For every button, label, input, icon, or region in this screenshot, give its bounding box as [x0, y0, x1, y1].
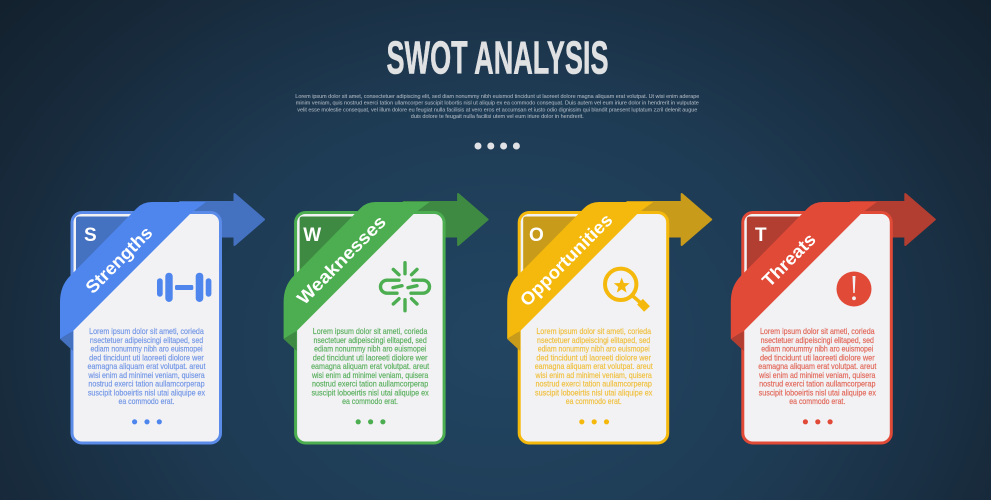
- arrow: [180, 194, 264, 245]
- body text: ediam nonummy nibh aro euismopei: [538, 345, 650, 354]
- letter tab: [300, 216, 374, 290]
- body text: nsectetuer adipeiscingi elitaped, sed: [313, 336, 427, 345]
- body text: Lorem ipsum dolor sit ameti, corieda: [760, 327, 875, 336]
- dots: [803, 419, 833, 424]
- body text: suscipit loboeirtis nisl utai aliquipe ex: [759, 388, 876, 397]
- arrow: [851, 194, 935, 245]
- body text: ea commodo erat.: [342, 397, 398, 406]
- panel: opportunities: [507, 194, 711, 443]
- header dots: [474, 142, 520, 150]
- arrow: [404, 194, 488, 245]
- ribbon fold: [507, 331, 520, 351]
- body text: Lorem ipsum dolor sit ameti, corieda: [89, 327, 204, 336]
- icon: warning: [836, 272, 872, 306]
- body text: ediam nonummy nibh aro euismopei: [90, 345, 203, 354]
- dots: [579, 419, 609, 424]
- body text: ded tincidunt uti laoreeti diolore wer: [536, 353, 651, 362]
- body text: ediam nonummy nibh aro euismopei: [314, 345, 426, 354]
- intro text block: minim veniam, quis nostrud exerci tation ullamcorper suscipit lobortis nisl ut aliquip ex ea commodo consequat. Duis autem vel eum iriure dolor in hendrerit in vulputate: [296, 101, 699, 107]
- body text: ea commodo erat.: [789, 397, 845, 406]
- body text: nsectetuer adipeiscingi elitaped, sed: [90, 336, 204, 345]
- dots: [356, 419, 386, 424]
- ribbon: [731, 202, 877, 339]
- card: [296, 212, 444, 443]
- card: [519, 212, 668, 443]
- body text: eamagna aliquam erat volutpat. areut: [88, 362, 206, 371]
- body text: ea commodo erat.: [566, 397, 622, 406]
- body text: wisi enim ad minimei veniam, quisera: [758, 371, 876, 380]
- body text: wisi enim ad minimei veniam, quisera: [87, 371, 205, 380]
- body text: ea commodo erat.: [118, 397, 174, 406]
- heading: Opportunities: [516, 210, 617, 310]
- body text: nostrud exerci tation aullamcorperap: [536, 380, 652, 389]
- body text: suscipit loboeirtis nisl utai aliquipe ex: [88, 388, 205, 397]
- panel: threats: [731, 194, 935, 443]
- letter tab: [76, 216, 150, 290]
- intro text block: [295, 94, 699, 120]
- icon: dumbbell: [157, 273, 211, 302]
- letter: S: [84, 225, 97, 246]
- body text: nostrud exerci tation aullamcorperap: [88, 380, 205, 389]
- body text: [535, 327, 653, 406]
- ribbon fold: [284, 331, 297, 351]
- body text: Lorem ipsum dolor sit ameti, corieda: [536, 327, 651, 336]
- panel: strengths: [60, 194, 264, 443]
- letter: O: [529, 225, 544, 246]
- body text: ded tincidunt uti laoreeti diolore wer: [760, 353, 875, 362]
- icon: magnifier with star: [605, 269, 647, 309]
- ribbon: [284, 202, 430, 339]
- arrow: [627, 194, 711, 245]
- body text: wisi enim ad minimei veniam, quisera: [535, 371, 652, 380]
- intro text block: velit esse molestie consequat, vel illum dolore eu feugiat nulla facilisis at vero eros et accumsan et iusto odio dignissim qui blandit praesent luptatum zzril delenit augue: [297, 107, 697, 113]
- body text: nsectetuer adipeiscingi elitaped, sed: [761, 336, 874, 345]
- heading: Threats: [758, 229, 820, 291]
- letter: W: [303, 225, 321, 246]
- dots: [132, 419, 162, 424]
- letter tab: [747, 216, 821, 290]
- title: SWOT ANALYSIS: [386, 31, 608, 83]
- body text: eamagna aliquam erat volutpat. areut: [535, 362, 653, 371]
- body text: Lorem ipsum dolor sit ameti, corieda: [313, 327, 428, 336]
- heading: Weaknesses: [293, 212, 390, 308]
- ribbon fold: [731, 331, 744, 351]
- body text: ediam nonummy nibh aro euismopei: [761, 345, 873, 354]
- body text: eamagna aliquam erat volutpat. areut: [758, 362, 877, 371]
- intro text block: duis dolore te feugait nulla facilisi utem vel eum iriure dolor in hendrerit.: [411, 114, 584, 120]
- body text: suscipit loboeirtis nisl utai aliquipe ex: [311, 388, 429, 397]
- body text: nsectetuer adipeiscingi elitaped, sed: [537, 336, 651, 345]
- body text: [311, 327, 430, 406]
- body text: [758, 327, 877, 406]
- body text: nostrud exerci tation aullamcorperap: [759, 380, 876, 389]
- intro text block: Lorem ipsum dolor sit amet, consectetuer adipiscing elit, sed diam nonummy nibh euismod tincidunt ut laoreet dolore magna aliquam erat volutpat. Ut wisi enim aderape: [295, 94, 699, 100]
- body text: ded tincidunt uti laoreeti diolore wer: [89, 353, 204, 362]
- heading: Strengths: [82, 223, 156, 297]
- letter: T: [755, 225, 767, 246]
- ribbon fold: [60, 331, 73, 351]
- body text: ded tincidunt uti laoreeti diolore wer: [313, 353, 428, 362]
- body text: eamagna aliquam erat volutpat. areut: [311, 362, 430, 371]
- letter tab: [523, 216, 597, 290]
- body text: wisi enim ad minimei veniam, quisera: [311, 371, 429, 380]
- panel: weaknesses: [284, 194, 488, 443]
- body text: suscipit loboeirtis nisl utai aliquipe ex: [535, 388, 652, 397]
- ribbon: [60, 202, 206, 339]
- body text: [87, 327, 206, 406]
- ribbon: [507, 202, 653, 339]
- card: [72, 212, 220, 443]
- icon: broken chain: [380, 263, 430, 311]
- card: [743, 212, 891, 443]
- body text: nostrud exerci tation aullamcorperap: [312, 380, 429, 389]
